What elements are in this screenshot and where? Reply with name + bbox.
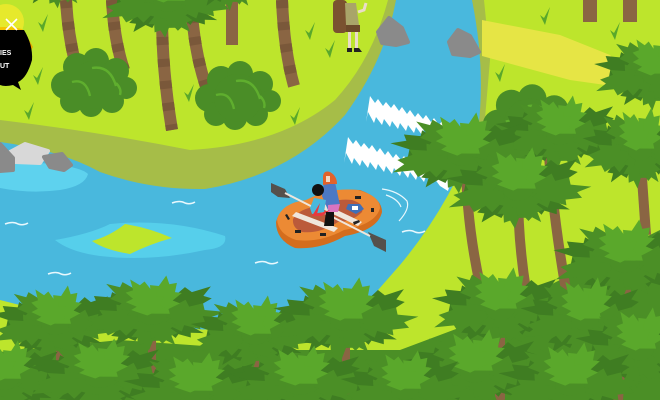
rapids	[344, 96, 476, 191]
right side palm crowns	[385, 32, 660, 400]
ticks on grass	[24, 7, 620, 125]
right side palm trunks	[466, 140, 646, 400]
river	[0, 0, 481, 330]
pot of gold badge	[0, 4, 33, 90]
rocks	[0, 18, 479, 171]
top palm crowns	[2, 0, 285, 39]
light water pool left	[0, 160, 88, 192]
yellow path	[482, 20, 640, 90]
raft with rowers	[271, 172, 408, 252]
bottom palm crowns	[0, 272, 473, 400]
island	[92, 224, 172, 254]
river ripples	[5, 202, 425, 275]
river bank right strip	[470, 0, 490, 130]
pot of gold badge: IES	[0, 50, 12, 57]
river bank left	[0, 0, 410, 200]
background palm trunks	[66, 0, 630, 130]
icon: close cross	[6, 19, 17, 30]
bushes	[51, 48, 577, 160]
pot of gold badge: UT	[0, 63, 10, 70]
trunk bands	[66, 0, 294, 130]
island shallows	[55, 222, 225, 258]
bottom palm trunks	[60, 320, 346, 395]
hiker	[333, 0, 366, 52]
foliage underlay	[0, 230, 660, 400]
